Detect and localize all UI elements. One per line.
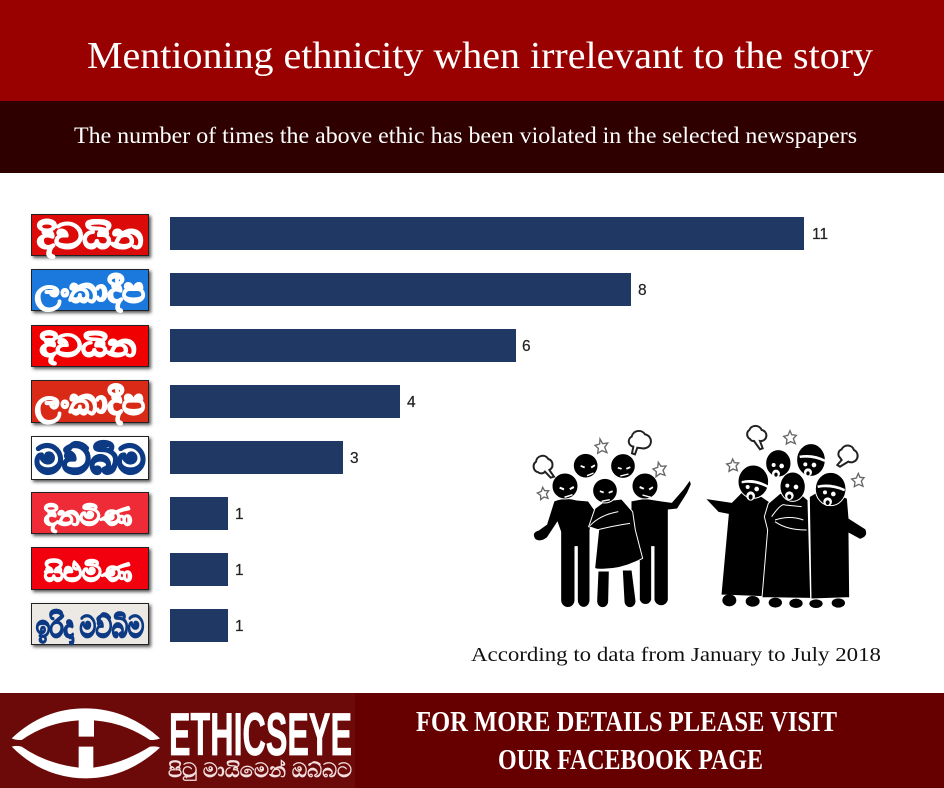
logo: Ethics Eye — [12, 701, 352, 782]
bar: 3 — [170, 441, 359, 474]
bar chart — [170, 217, 828, 642]
logo: Divaina: දිවයින — [37, 218, 143, 258]
bar: 6: 6 — [522, 338, 531, 355]
logo: Lankadeepa red: ලංකාදීප — [35, 381, 145, 425]
icon: puffs and sparks — [534, 431, 666, 500]
bar: 11 — [170, 217, 828, 250]
logo: Irida Divaina — [32, 326, 151, 369]
icon: eye mark — [12, 708, 160, 778]
bar: 1 Silumina — [170, 553, 244, 586]
logo: Irida Mawbima — [32, 604, 151, 647]
call to action — [416, 707, 837, 776]
bar: 8: 8 — [638, 282, 647, 299]
title: Mentioning ethnicity when irrelevant to the story — [87, 35, 874, 77]
bar: 8 — [170, 273, 647, 306]
logo: Irida Divaina: දිවයින — [40, 330, 136, 365]
bar: 1 Irida Mawbima: 1 — [235, 618, 244, 635]
logo: Lankadeepa blue: ලංකාදීප — [35, 272, 145, 312]
logo: Divaina — [32, 214, 151, 258]
panel: newspaper logos — [32, 214, 151, 647]
icon: angry group in western clothing — [533, 431, 691, 608]
panel: footer — [0, 693, 944, 788]
wordmark: ETHICSEYE — [169, 701, 352, 768]
bar: 6 — [170, 329, 531, 362]
call to action: OUR FACEBOOK PAGE — [498, 745, 763, 776]
bar: 4 — [170, 385, 416, 418]
logo: Mawbima: මව්බිම — [35, 440, 145, 482]
bar: 1 Dinamina — [170, 497, 244, 530]
icon: angry group in robes — [705, 426, 867, 608]
data source note: According to data from January to July 2018 — [471, 644, 881, 666]
subtitle: The number of times the above ethic has been violated in the selected newspapers — [74, 123, 857, 148]
bar: 1 Dinamina: 1 — [235, 506, 244, 523]
logo: Dinamina: දිනමිණ — [44, 501, 132, 533]
bar: 3: 3 — [350, 450, 359, 467]
bar: 1 Irida Mawbima — [170, 609, 244, 642]
bar: 11: 11 — [812, 226, 828, 243]
bar: 1 Silumina: 1 — [235, 562, 244, 579]
logo: Irida Mawbima: ඉරිදා මව්බිම — [36, 609, 144, 645]
bar: 4: 4 — [407, 394, 416, 411]
tagline: පිටු මායිමෙන් ඔබ්බට — [168, 758, 352, 782]
logo: Silumina — [32, 548, 151, 592]
logo: Dinamina — [32, 492, 151, 536]
icon: robed group puffs and sparks — [727, 426, 864, 487]
logo: Silumina: සිළුමිණ — [44, 557, 132, 587]
call to action: FOR MORE DETAILS PLEASE VISIT — [416, 707, 837, 738]
panel: subtitle banner — [0, 101, 944, 173]
panel: title banner — [0, 0, 944, 101]
